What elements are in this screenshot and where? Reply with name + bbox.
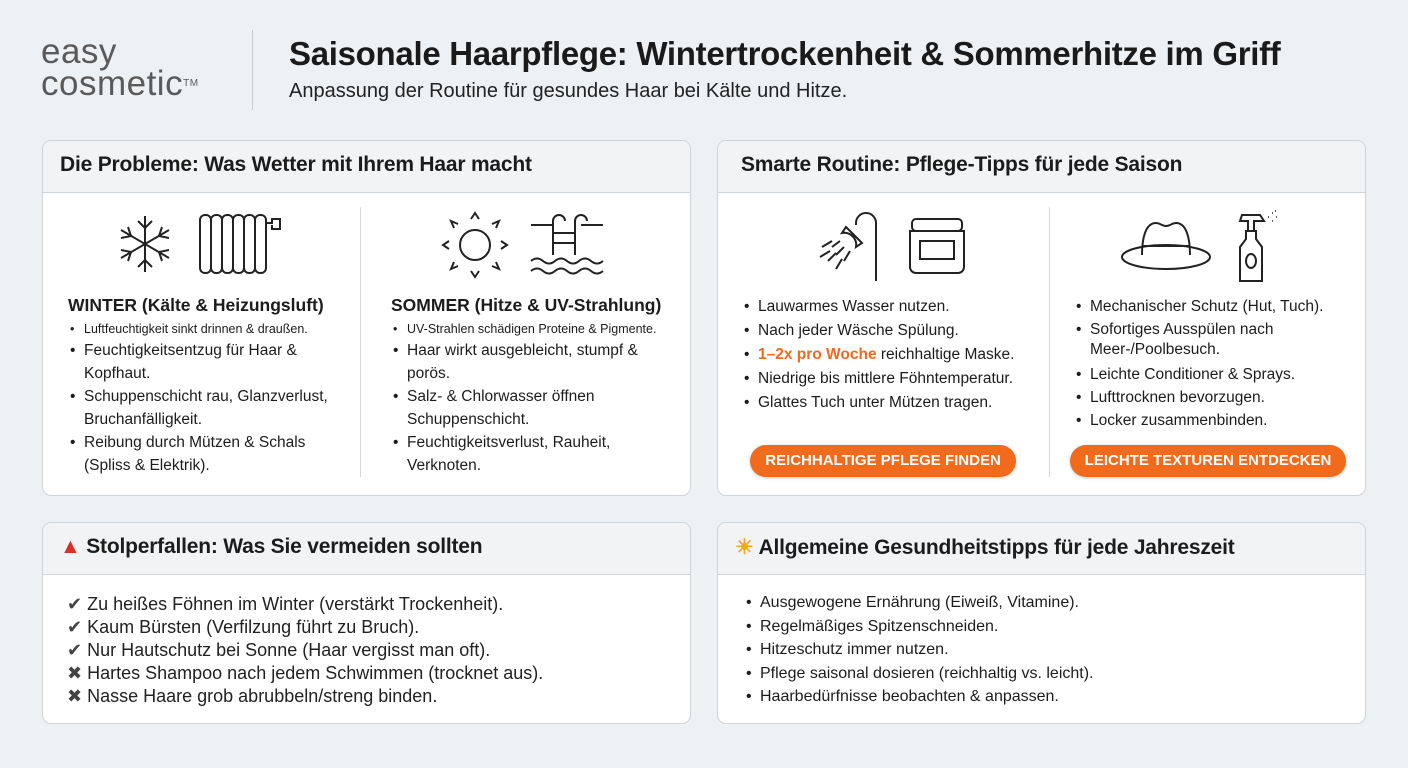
heading: general tips: ☀ Allgemeine Gesundheitstipps für jede Jahreszeit [735, 536, 1235, 559]
text: winter: Luftfeuchtigkeit sinkt drinnen & draußen. [84, 322, 308, 336]
list: general tips: Haarbedürfnisse beobachten & anpassen. [760, 688, 1059, 705]
list: general tips: Ausgewogene Ernährung (Eiweiß, Vitamine). [760, 594, 1079, 611]
text: summer routine: Locker zusammenbinden. [1090, 412, 1268, 429]
icon: snowflake [120, 216, 170, 272]
panel: routine [717, 140, 1366, 496]
list: pitfalls: ✖ Hartes Shampoo nach jedem Schwimmen (trocknet aus). [67, 663, 543, 683]
text: winter routine: Glattes Tuch unter Mützen tragen. [758, 394, 992, 411]
text: winter routine: Nach jeder Wäsche Spülung. [758, 322, 959, 339]
text: winter routine [744, 298, 1014, 411]
text: winter: Reibung durch Mützen & Schals [84, 434, 305, 451]
text: summer: SOMMER (Hitze & UV-Strahlung) [391, 295, 661, 315]
heading: problems [43, 141, 690, 193]
button: light textures: LEICHTE TEXTUREN ENTDECKEN [1085, 452, 1331, 469]
icon: jar [909, 218, 965, 274]
list: pitfalls: ✔ Zu heißes Föhnen im Winter (verstärkt Trockenheit). [67, 594, 503, 614]
text: summer: Feuchtigkeitsverlust, Rauheit, Verknoten. [407, 434, 610, 474]
panel: problems [42, 140, 691, 496]
logo: easy [41, 32, 117, 71]
button: rich care [750, 445, 1016, 477]
list: general tips: Pflege saisonal dosieren (reichhaltig vs. leicht). [760, 664, 1094, 682]
text: summer: UV-Strahlen schädigen Proteine & Pigmente. [407, 322, 656, 336]
icon: sun [441, 211, 509, 279]
panel: pitfalls [42, 522, 691, 724]
text: winter: Schuppenschicht rau, Glanzverlust, Bruchanfälligkeit. [84, 388, 328, 428]
heading: routine [718, 141, 1365, 193]
list: general tips: Regelmäßiges Spitzenschneiden. [760, 618, 998, 634]
subtitle: Anpassung der Routine für gesundes Haar bei Kälte und Hitze. [289, 80, 847, 102]
text: winter: WINTER (Kälte & Heizungsluft) [68, 295, 324, 315]
button: rich care: REICHHALTIGE PFLEGE FINDEN [765, 452, 1001, 469]
text: winter routine: 1–2x pro Woche reichhaltige Maske. [758, 346, 1014, 363]
icon: radiator [199, 214, 281, 274]
list: pitfalls [67, 594, 543, 706]
text: summer: Salz- & Chlorwasser öffnen Schuppenschicht. [407, 388, 595, 428]
button: light textures [1070, 445, 1346, 477]
logo: cosmeticTM [41, 64, 199, 103]
text: summer: Haar wirkt ausgebleicht, stumpf & porös. [407, 342, 638, 382]
text: summer routine: Lufttrocknen bevorzugen. [1090, 389, 1265, 406]
logo [41, 32, 199, 103]
heading: pitfalls [43, 523, 690, 575]
icon: shower [820, 212, 877, 281]
text: summer routine: Sofortiges Ausspülen nach Meer-/Poolbesuch. [1090, 321, 1274, 358]
text: winter: Feuchtigkeitsentzug für Haar & Kopfhaut. [84, 342, 297, 382]
text: summer routine: Mechanischer Schutz (Hut, Tuch). [1090, 298, 1323, 315]
heading: general tips [718, 523, 1365, 575]
text: winter: (Spliss & Elektrik). [84, 457, 210, 474]
text: winter routine: Lauwarmes Wasser nutzen. [758, 298, 950, 315]
list: pitfalls: ✖ Nasse Haare grob abrubbeln/streng binden. [67, 686, 437, 706]
icon: spray [1238, 210, 1277, 282]
text: summer [391, 295, 661, 474]
heading: pitfalls: ▲ Stolperfallen: Was Sie vermeiden sollten [60, 535, 482, 558]
list: pitfalls: ✔ Kaum Bürsten (Verfilzung führt zu Bruch). [67, 617, 419, 637]
title: Saisonale Haarpflege: Wintertrockenheit & Sommerhitze im Griff [289, 35, 1280, 72]
text: winter [68, 295, 328, 474]
list: general tips: Hitzeschutz immer nutzen. [760, 641, 949, 658]
text: winter routine: Niedrige bis mittlere Föhntemperatur. [758, 370, 1013, 387]
panel: general tips [717, 522, 1366, 724]
text: summer routine [1076, 298, 1323, 429]
list: pitfalls: ✔ Nur Hautschutz bei Sonne (Haar vergisst man oft). [67, 640, 490, 660]
icon: hat [1121, 222, 1211, 270]
icon: pool [530, 214, 604, 274]
list: general tips [746, 594, 1094, 705]
text: summer routine: Leichte Conditioner & Sprays. [1090, 366, 1295, 383]
heading: problems: Die Probleme: Was Wetter mit Ihrem Haar macht [60, 153, 532, 176]
heading: routine: Smarte Routine: Pflege-Tipps für jede Saison [741, 153, 1182, 176]
